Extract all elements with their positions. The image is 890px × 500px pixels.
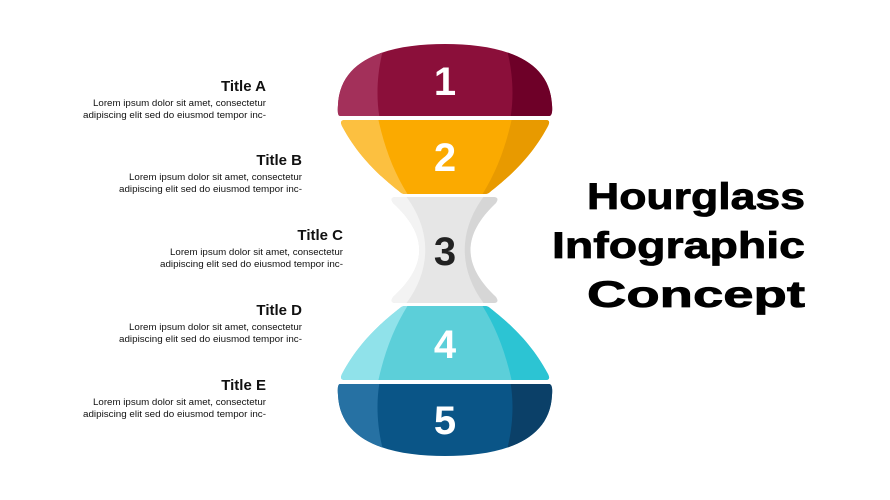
label E — [83, 377, 266, 419]
label B: Lorem ipsum dolor sit amet, consectetur — [129, 172, 302, 182]
numbers: 1 — [434, 60, 456, 104]
segment 1 — [338, 44, 552, 116]
segment 3 — [392, 197, 498, 303]
label A: Lorem ipsum dolor sit amet, consectetur — [93, 98, 266, 108]
label B: adipiscing elit sed do eiusmod tempor inc- — [119, 184, 302, 194]
label D: Lorem ipsum dolor sit amet, consectetur — [129, 322, 302, 332]
numbers: 4 — [434, 323, 457, 367]
main heading: Concept — [587, 274, 805, 315]
numbers: 3 — [434, 230, 456, 274]
numbers: 5 — [434, 399, 456, 443]
label A: adipiscing elit sed do eiusmod tempor inc- — [83, 110, 266, 120]
label C: adipiscing elit sed do eiusmod tempor inc- — [160, 259, 343, 269]
segment 2 — [341, 120, 550, 194]
numbers: 2 — [434, 136, 456, 180]
label A — [83, 78, 266, 120]
label C: Lorem ipsum dolor sit amet, consectetur — [170, 247, 343, 257]
segment 4 — [341, 306, 550, 380]
main heading — [552, 176, 805, 315]
label B: Title B — [256, 152, 302, 169]
label E: Title E — [221, 377, 266, 394]
numbers — [434, 60, 457, 443]
label D: adipiscing elit sed do eiusmod tempor inc- — [119, 334, 302, 344]
main heading: Infographic — [552, 225, 805, 266]
main heading: Hourglass — [587, 176, 805, 217]
label D — [119, 302, 302, 344]
segment 5 — [338, 384, 552, 456]
label D: Title D — [256, 302, 302, 319]
label A: Title A — [221, 78, 266, 95]
label C: Title C — [297, 227, 343, 244]
label E: Lorem ipsum dolor sit amet, consectetur — [93, 397, 266, 407]
label C — [160, 227, 343, 269]
label B — [119, 152, 302, 194]
label E: adipiscing elit sed do eiusmod tempor inc- — [83, 409, 266, 419]
